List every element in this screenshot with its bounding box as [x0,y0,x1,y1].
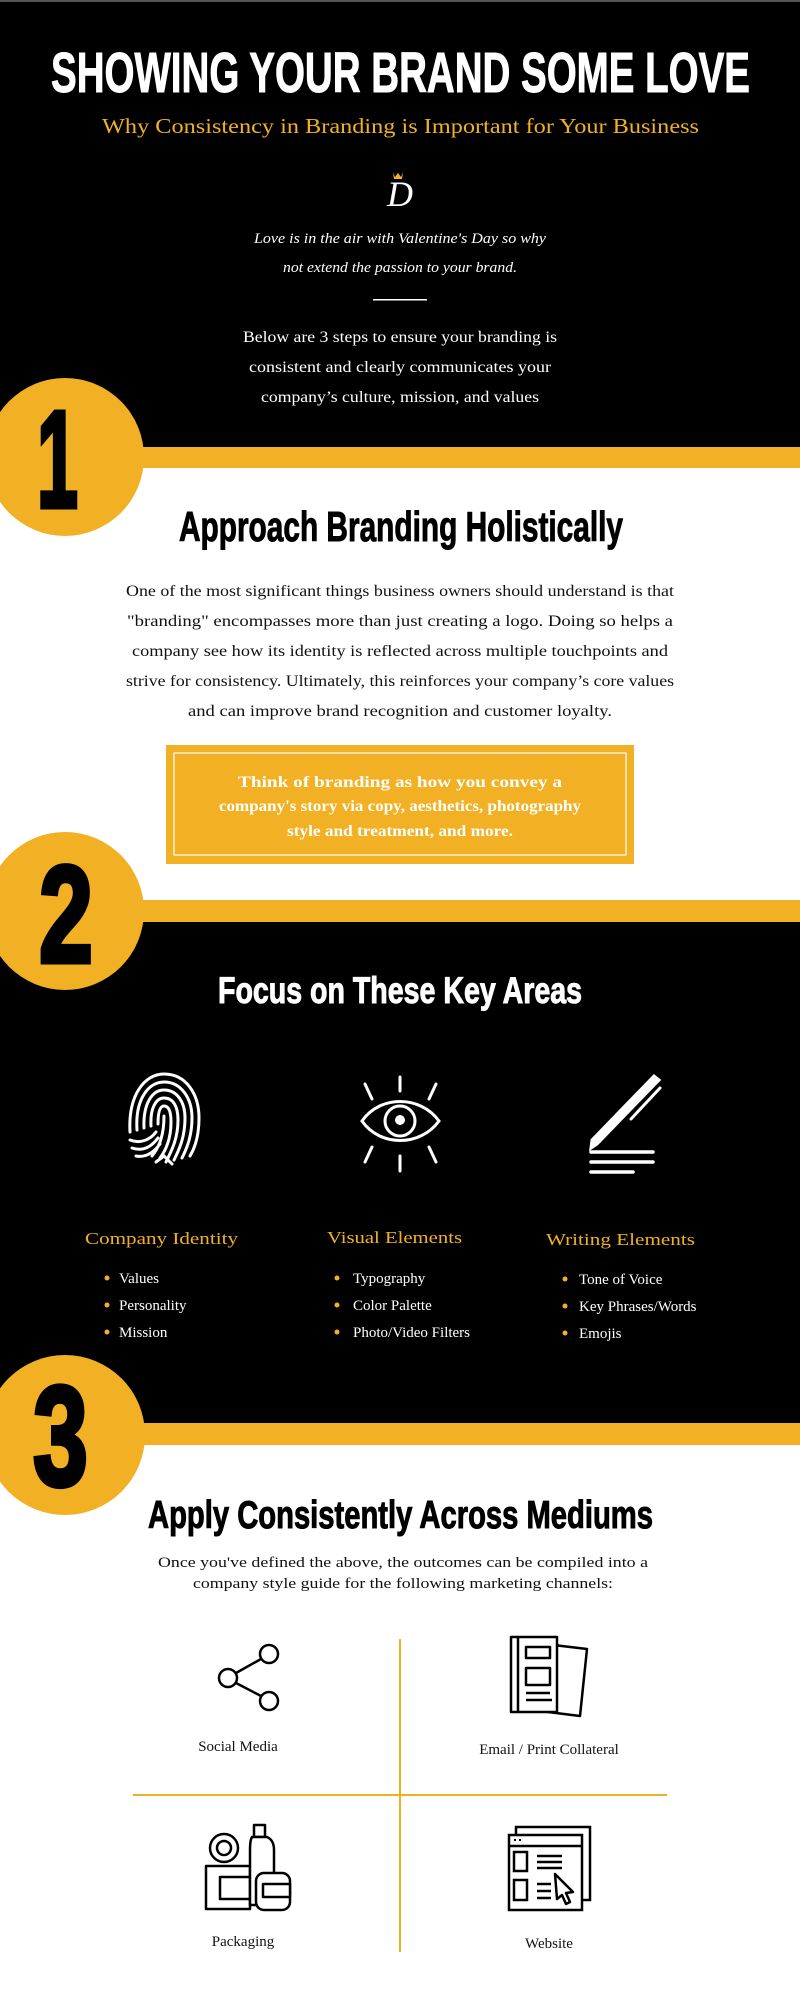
column: Writing Elements: Key Phrases/Words [579,1299,697,1315]
section 1 paragraph: "branding" encompasses more than just creating a logo. Doing so helps a [127,613,673,630]
column: Company Identity [85,1229,239,1341]
icon: pen [591,1076,660,1172]
column: Visual Elements: Typography [353,1271,426,1287]
intro italic text: Love is in the air with Valentine's Day so why [253,231,546,247]
icon: fingerprint [130,1074,199,1164]
intro body text: Below are 3 steps to ensure your branding is [243,329,557,346]
column: Writing Elements [546,1230,697,1342]
column: Visual Elements [327,1228,470,1341]
column: Company Identity: Mission [119,1325,168,1341]
icon: packaging [206,1825,290,1910]
column: Company Identity: Values [119,1271,159,1287]
section 3 paragraph [158,1555,648,1592]
grid dividers [133,1639,667,1952]
callout box: style and treatment, and more. [287,823,513,840]
column: Writing Elements: Emojis [579,1326,622,1342]
section 3 paragraph: Once you've defined the above, the outcomes can be compiled into a [158,1555,648,1571]
section 3 paragraph: company style guide for the following marketing channels: [193,1576,613,1592]
section 1 paragraph: One of the most significant things business owners should understand is that [126,583,675,600]
icon: website [509,1827,590,1910]
intro body text: consistent and clearly communicates your [249,359,552,376]
heading: Approach Branding Holistically: Approach Branding Holistically [179,503,623,550]
band 3 [0,1423,800,1445]
column: Visual Elements: Photo/Video Filters [353,1325,470,1341]
callout box: Think of branding as how you convey a [238,774,562,791]
band 2 [0,900,800,922]
heading: Focus on These Key Areas: Focus on These Key Areas [218,970,582,1011]
section 1 paragraph: strive for consistency. Ultimately, this reinforces your company’s core values [126,673,674,690]
background: header black [0,0,800,448]
number badge 2 [0,832,144,992]
intro body text: company’s culture, mission, and values [261,389,539,406]
column: Writing Elements: Tone of Voice [579,1272,663,1288]
section 1 paragraph: company see how its identity is reflected across multiple touchpoints and [132,643,668,660]
number badge 3 [0,1355,145,1516]
label: Social Media: Social Media [198,1739,278,1755]
subtitle: Why Consistency in Branding is Important for Your Business [102,114,699,138]
intro body text [243,329,557,406]
column: Company Identity: Personality [119,1298,187,1314]
section 1 paragraph [126,583,675,720]
intro italic text [253,231,546,276]
section 1 paragraph: and can improve brand recognition and customer loyalty. [188,703,612,720]
column: Visual Elements: Visual Elements [327,1228,462,1247]
icon: eye [362,1077,439,1171]
label: Website: Website [525,1936,573,1952]
callout box [166,745,634,864]
logo: D with crown: D [386,174,413,214]
band 1 [0,447,800,468]
column: Company Identity: Company Identity [85,1229,239,1248]
column: Writing Elements: Writing Elements [546,1230,695,1249]
number badge 2: 2 [39,838,93,992]
callout box: company's story via copy, aesthetics, photography [219,798,581,815]
background: section 2 black [0,921,800,1424]
icon: email / print [511,1637,587,1716]
label: Packaging: Packaging [212,1934,275,1950]
label: Email / Print Collateral: Email / Print Collateral [479,1742,619,1758]
number badge 1 [0,378,144,537]
number badge 1: 1 [37,383,78,537]
icon: share [219,1645,278,1710]
column: Visual Elements: Color Palette [353,1298,432,1314]
intro italic text: not extend the passion to your brand. [283,260,517,276]
number badge 3: 3 [33,1357,88,1516]
